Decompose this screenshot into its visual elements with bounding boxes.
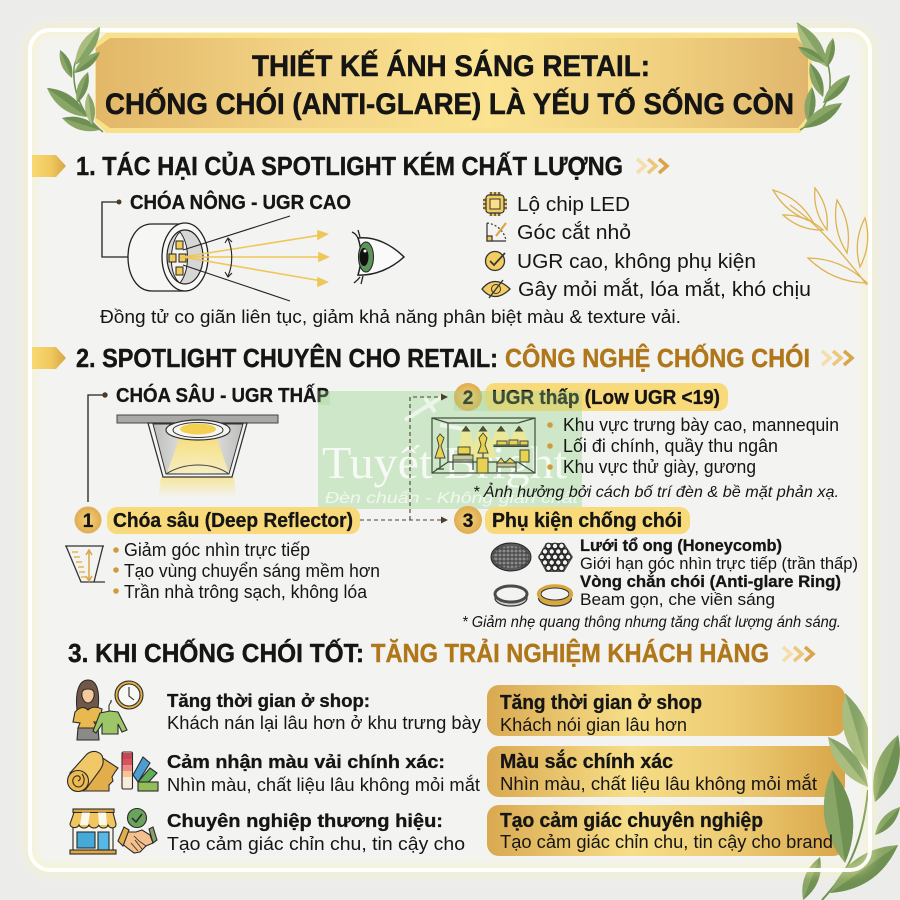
text: Nhìn màu, chất liệu lâu không mỏi mắt bbox=[167, 774, 480, 795]
icon: funnel bbox=[65, 546, 105, 582]
pill: UGR thấp (Low UGR <19) bbox=[492, 386, 720, 409]
icon: store interior bbox=[432, 418, 535, 473]
tag bbox=[32, 347, 66, 369]
section 1 heading bbox=[32, 150, 667, 181]
label: CHÓA SÂU - UGR THẤP bbox=[116, 383, 329, 407]
watermark tint over pill bbox=[318, 391, 582, 411]
footnote: * Giảm nhẹ quang thông nhưng tăng chất lượng ánh sáng. bbox=[462, 614, 841, 631]
icon: crossed eye bbox=[482, 280, 510, 298]
item 2: low UGR bbox=[432, 383, 839, 501]
accessory text: Vòng chắn chói (Anti-glare Ring) bbox=[580, 572, 841, 591]
badge bbox=[74, 506, 102, 534]
symptom list bbox=[482, 192, 811, 301]
tag bbox=[32, 155, 66, 177]
title text: THIẾT KẾ ÁNH SÁNG RETAIL: bbox=[252, 49, 650, 83]
chevrons bbox=[783, 647, 813, 661]
icon: check bbox=[486, 252, 505, 270]
connector bbox=[88, 395, 105, 502]
row 1 bbox=[73, 680, 482, 740]
shallow reflector diagram bbox=[102, 190, 404, 301]
note: pupil: Đồng tử co giãn liên tục, giảm khả năng phân biệt màu & texture vải. bbox=[100, 306, 681, 327]
fixture bbox=[117, 415, 278, 497]
highlight text: CÔNG NGHỆ CHỐNG CHÓI bbox=[505, 343, 810, 373]
label: CHÓA NÔNG - UGR CAO bbox=[130, 190, 351, 214]
pill 3 text bbox=[500, 810, 833, 852]
dashed connectors bbox=[360, 394, 448, 524]
pill: Chóa sâu (Deep Reflector) bbox=[113, 509, 353, 532]
title banner bbox=[95, 33, 812, 133]
text: Tạo cảm giác chỉn chu, tin cậy cho bbox=[167, 833, 465, 854]
highlight text: TĂNG TRẢI NGHIỆM KHÁCH HÀNG bbox=[371, 638, 769, 668]
pill 1 text bbox=[500, 692, 702, 735]
spotlight body bbox=[128, 223, 208, 291]
pill 3 text: Tạo cảm giác chuyên nghiệp bbox=[500, 810, 763, 832]
accessory text bbox=[580, 536, 858, 609]
icon: shop and handshake bbox=[70, 808, 157, 854]
pill 2 text: Nhìn màu, chất liệu lâu không mỏi mắt bbox=[500, 773, 817, 794]
badge: 3 bbox=[463, 511, 473, 532]
decoration: top right leaves bbox=[790, 18, 854, 134]
bullet list: Tạo vùng chuyển sáng mềm hơn bbox=[124, 560, 380, 581]
title text: CHỐNG CHÓI (ANTI-GLARE) LÀ YẾU TỐ SỐNG CÒN bbox=[105, 87, 794, 121]
text bbox=[167, 751, 480, 795]
watermark: Tuyết Bright bbox=[322, 437, 567, 488]
badge: 1 bbox=[83, 511, 94, 532]
icon: shopper and clock bbox=[73, 680, 143, 740]
panel: benefit pills bbox=[487, 685, 845, 856]
connector bbox=[102, 202, 128, 257]
bullet list: Khu vực trưng bày cao, mannequin bbox=[563, 414, 839, 435]
section 3 heading bbox=[68, 638, 813, 668]
pill 2 text: Màu sắc chính xác bbox=[500, 749, 673, 773]
footnote: * Ảnh hưởng bởi cách bố trí đèn & bề mặt phản xạ. bbox=[473, 482, 839, 501]
icon: eye bbox=[352, 230, 404, 284]
text: Tăng thời gian ở shop: bbox=[167, 690, 370, 711]
icon: ring silver bbox=[495, 586, 527, 606]
section 2 heading bbox=[32, 343, 852, 373]
icon: honeycomb disc bbox=[491, 543, 531, 571]
pill 1 text: Khách nói gian lâu hơn bbox=[500, 714, 687, 735]
badge bbox=[454, 506, 482, 534]
bullet list: Trần nhà trông sạch, không lóa bbox=[124, 581, 368, 602]
row 2 bbox=[68, 751, 480, 795]
watermark bbox=[318, 391, 582, 509]
text: Cảm nhận màu vải chính xác: bbox=[167, 751, 445, 772]
heading text: 3. KHI CHỐNG CHÓI TỐT: bbox=[68, 638, 364, 668]
item 3: accessories bbox=[454, 506, 858, 631]
text: crossed eye: Gây mỏi mắt, lóa mắt, khó chịu bbox=[518, 278, 811, 301]
accessory text: Beam gọn, che viền sáng bbox=[580, 590, 775, 609]
icon: chip bbox=[483, 192, 507, 216]
bullet list bbox=[113, 539, 380, 602]
pill 2 text bbox=[500, 749, 817, 794]
accessory text: Lưới tổ ong (Honeycomb) bbox=[580, 536, 782, 555]
bullet list: Giảm góc nhìn trực tiếp bbox=[124, 539, 310, 560]
decoration: bottom right plant bbox=[797, 690, 900, 900]
bullet list bbox=[547, 414, 839, 477]
bullet list: Lối đi chính, quầy thu ngân bbox=[563, 435, 778, 456]
item 1: deep reflector bbox=[65, 506, 380, 602]
row 3 bbox=[70, 808, 465, 854]
pill 3 text: Tạo cảm giác chỉn chu, tin cậy cho brand bbox=[500, 831, 833, 852]
decoration: gold outline leaves bbox=[770, 186, 870, 289]
badge bbox=[454, 383, 482, 411]
heading text: 1. TÁC HẠI CỦA SPOTLIGHT KÉM CHẤT LƯỢNG bbox=[76, 150, 623, 181]
text: angle: Góc cắt nhỏ bbox=[517, 221, 631, 244]
chevrons bbox=[637, 159, 667, 173]
icon: ring gold bbox=[538, 586, 572, 606]
pill 1 text: Tăng thời gian ở shop bbox=[500, 692, 702, 714]
decoration: top left leaves bbox=[43, 23, 106, 136]
text bbox=[167, 810, 465, 854]
beam angle bbox=[183, 216, 290, 301]
deep reflector diagram bbox=[88, 383, 329, 502]
watermark: Đèn chuẩn - Không gian chất bbox=[325, 489, 579, 507]
benefit pill texts bbox=[500, 692, 833, 852]
light rays bbox=[183, 231, 328, 286]
text: Chuyên nghiệp thương hiệu: bbox=[167, 810, 443, 831]
title text bbox=[105, 49, 794, 121]
text: Khách nán lại lâu hơn ở khu trưng bày bbox=[167, 712, 482, 733]
icon: angle bbox=[487, 223, 506, 241]
text bbox=[167, 690, 482, 733]
icon: honeycomb hexagon bbox=[538, 543, 573, 572]
chevrons bbox=[822, 351, 852, 365]
badge: 2 bbox=[463, 388, 473, 409]
pill: Phụ kiện chống chói bbox=[492, 509, 682, 532]
text: chip: Lộ chip LED bbox=[517, 193, 630, 216]
heading text: 2. SPOTLIGHT CHUYÊN CHO RETAIL: bbox=[76, 343, 498, 373]
text: check: UGR cao, không phụ kiện bbox=[517, 250, 756, 273]
icon: fabric roll and swatches bbox=[68, 752, 158, 792]
bullet list: Khu vực thử giày, gương bbox=[563, 456, 756, 477]
accessory text: Giới hạn góc nhìn trực tiếp (trần thấp) bbox=[580, 554, 858, 573]
